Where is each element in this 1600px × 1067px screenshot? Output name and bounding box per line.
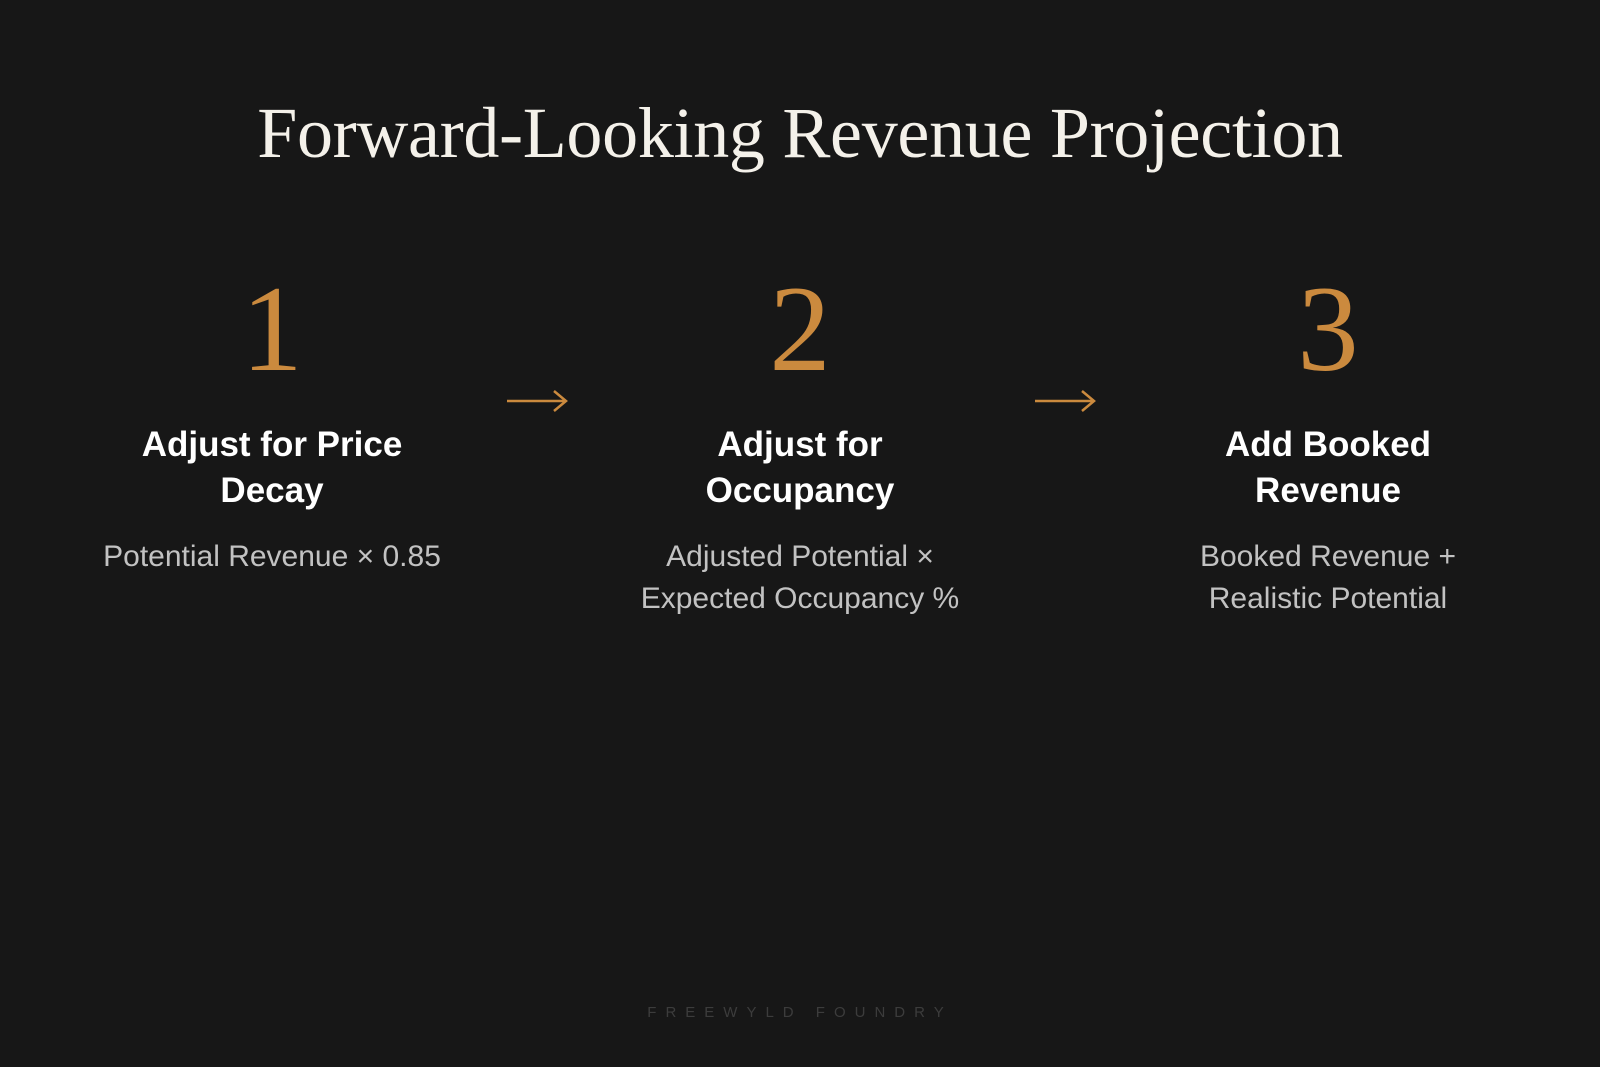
formula 2: Adjusted Potential ×: [666, 540, 934, 573]
title: Forward-Looking Revenue Projection: [257, 93, 1343, 173]
heading 1: Decay: [220, 471, 324, 510]
heading 2: Adjust for: [717, 425, 883, 464]
footer: FREEWYLD FOUNDRY: [647, 1004, 953, 1021]
number 3: 3: [1297, 260, 1359, 397]
heading 1: Adjust for Price: [142, 425, 402, 464]
step 1: [103, 260, 441, 573]
heading 2: [706, 425, 894, 510]
heading 3: [1225, 425, 1431, 510]
step 3: [1200, 260, 1456, 615]
formula 2: Expected Occupancy %: [641, 582, 959, 615]
formula 2: [641, 540, 959, 615]
number 1: 1: [241, 260, 303, 397]
arrow 2: [1035, 390, 1096, 412]
number 2: 2: [769, 260, 831, 397]
formula 3: Booked Revenue +: [1200, 540, 1456, 573]
formula 3: [1200, 540, 1456, 615]
heading 2: Occupancy: [706, 471, 894, 510]
formula 1: Potential Revenue × 0.85: [103, 540, 441, 573]
arrow 1: [507, 390, 568, 412]
heading 1: [142, 425, 402, 510]
formula 3: Realistic Potential: [1209, 582, 1447, 615]
step 2: [641, 260, 959, 615]
heading 3: Revenue: [1255, 471, 1401, 510]
heading 3: Add Booked: [1225, 425, 1431, 464]
